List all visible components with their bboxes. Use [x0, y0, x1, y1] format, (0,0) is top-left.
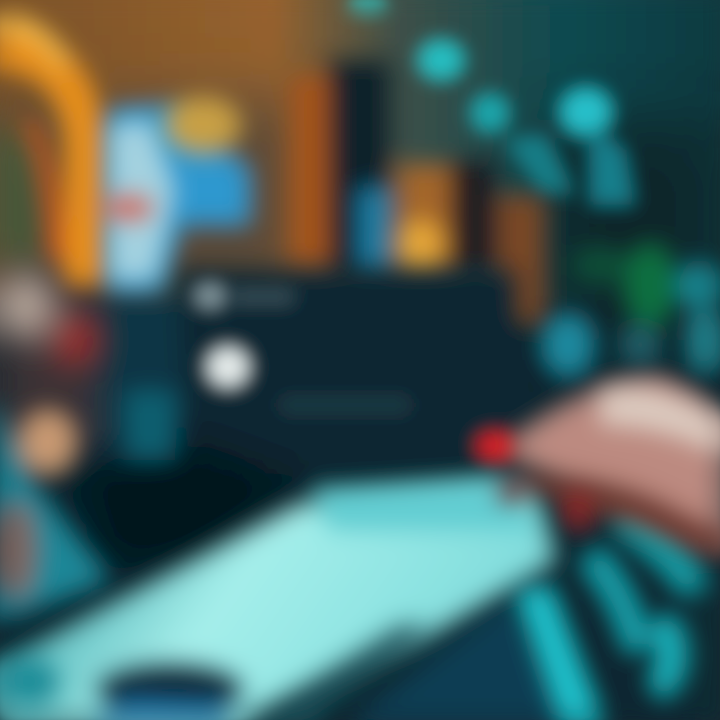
floating teal dots	[348, 0, 635, 205]
blue poster	[102, 97, 250, 290]
left pale and red spots	[0, 274, 98, 364]
card text smudge	[232, 290, 294, 304]
green plant	[542, 243, 720, 377]
left dark shelf area	[0, 130, 205, 510]
small dark fingertip	[498, 480, 526, 504]
dark and orange vertical shapes	[290, 60, 544, 325]
card logo	[194, 283, 226, 309]
light desk	[0, 480, 555, 720]
card chip glow	[206, 346, 250, 388]
card number smudge	[280, 398, 410, 412]
hand with red nails	[475, 378, 720, 558]
red fingernail	[475, 431, 515, 461]
bottom dark objects	[90, 600, 570, 720]
dark payment card	[178, 268, 522, 475]
left teal figure	[0, 390, 175, 620]
teal swirl ribbons bottom right	[515, 515, 720, 720]
dark shadow under card	[70, 440, 300, 565]
lower red fingertip	[562, 490, 594, 530]
orange arch	[0, 16, 105, 285]
